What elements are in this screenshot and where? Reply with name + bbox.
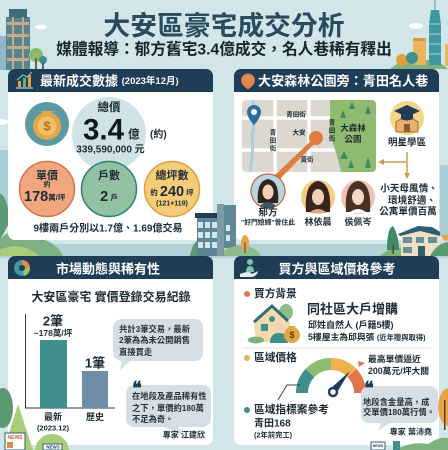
subtitle: 媒體報導：郁方舊宅3.4億成交，名人巷稀有釋出 bbox=[56, 40, 392, 58]
map: 青田街 bbox=[286, 110, 306, 118]
background skyline left bbox=[0, 36, 63, 256]
arrows bbox=[378, 152, 410, 179]
icon: money bag: $ bbox=[43, 118, 51, 134]
section: benchmark project: (2年前完工) bbox=[254, 430, 293, 440]
bar chart: 歷史 bbox=[86, 411, 104, 422]
text: neighbourhood features bbox=[379, 182, 438, 218]
portrait: Patty Hou bbox=[341, 180, 375, 214]
metric: households: 2 戶 bbox=[100, 189, 118, 205]
label: star school district: 明星學區 bbox=[388, 136, 426, 148]
map: 田 bbox=[270, 136, 276, 144]
portrait: Lin Yi-chen bbox=[301, 180, 335, 214]
title: 大安區豪宅成交分析 bbox=[103, 11, 345, 41]
metric: unit price: 單價 bbox=[36, 168, 58, 182]
callout: expert quote: 不足為奇。 bbox=[132, 414, 174, 424]
icon: money bag bbox=[25, 102, 69, 146]
map: 街 bbox=[329, 134, 336, 142]
total price: 339,590,000 元 bbox=[76, 144, 145, 156]
total price: (約) bbox=[150, 128, 167, 140]
callout: expert quote: 地段含金量高，成 bbox=[363, 397, 430, 407]
label: Lin Yi-chen: 林依晨 bbox=[304, 216, 332, 227]
portrait: Yu Fang bbox=[251, 174, 285, 208]
icon: location pin bbox=[242, 74, 254, 89]
label: Yu Fang: 郁方 bbox=[258, 206, 278, 218]
buyer details: 同社區大戶增購 bbox=[307, 302, 398, 316]
total price bbox=[72, 97, 167, 171]
scenery: lower-left trees and newspapers bbox=[0, 388, 69, 450]
icon: school bbox=[390, 101, 424, 135]
bar chart: 2筆 bbox=[43, 314, 63, 328]
section: regional price: 區域價格 bbox=[254, 351, 297, 364]
panel heading: 大安森林公園旁：青田名人巷 bbox=[258, 72, 428, 88]
callout: expert quote bbox=[126, 378, 211, 440]
metric: total area: 約 240 坪 bbox=[150, 184, 194, 200]
metric: unit price: 178萬/坪 bbox=[24, 189, 66, 205]
metric: unit price: 約 bbox=[44, 180, 50, 188]
callout: expert quote: 之下，單價約180萬 bbox=[132, 403, 204, 413]
icon: rising chart bbox=[16, 72, 33, 88]
map: 青 bbox=[270, 128, 277, 136]
highest price note: 200萬元/坪大關 bbox=[368, 365, 429, 376]
callout: expert quote: 專家 江建欣 bbox=[163, 430, 205, 440]
callout: expert quote bbox=[361, 378, 438, 436]
metric: total area bbox=[144, 162, 200, 216]
scenery: house and trees right bbox=[380, 165, 448, 256]
bar chart: 1筆 bbox=[85, 356, 105, 370]
callout: three transactions bbox=[113, 319, 203, 370]
scenery: central buildings bbox=[190, 204, 261, 256]
callout: expert quote: 交單價180萬行情。 bbox=[363, 407, 435, 417]
gauge chart bbox=[302, 361, 365, 396]
section: benchmark project bbox=[244, 403, 329, 440]
panel heading: 最新成交數據 (2023年12月) bbox=[40, 74, 179, 88]
callout: three transactions: 直接買走 bbox=[119, 347, 153, 357]
icon: Taipei 101 skyline right bbox=[390, 0, 448, 69]
metric: total area: (121+119) bbox=[156, 200, 188, 208]
panel heading: 買方與區域價格參考 bbox=[278, 262, 396, 276]
metric: unit price bbox=[20, 162, 74, 216]
section: buyer background: 買方背景 bbox=[254, 287, 297, 300]
icon: house with buyer and money bag: $ bbox=[289, 330, 295, 340]
callout: expert quote: 專家 葉沛堯 bbox=[390, 426, 432, 436]
text: neighbourhood features: 環境舒適、 bbox=[388, 194, 436, 206]
total price: 3.4 bbox=[83, 114, 125, 146]
panel: latest transaction data bbox=[8, 69, 213, 240]
icon: house with buyer and money bag bbox=[248, 304, 300, 344]
icon: hand with person bbox=[240, 259, 258, 277]
icon: pie chart bbox=[14, 260, 30, 276]
map: 大安 bbox=[292, 128, 306, 136]
buyer details bbox=[307, 302, 426, 342]
total price: 總價 bbox=[98, 100, 121, 114]
highest price note bbox=[368, 353, 429, 376]
bar chart bbox=[26, 314, 115, 432]
metric: households: 戶數 bbox=[98, 168, 120, 182]
scenery: lower-left trees and newspapers: NEWS bbox=[46, 444, 60, 450]
panel heading: 市場動態與稀有性 bbox=[56, 262, 160, 276]
background water band bbox=[0, 244, 448, 258]
label: Patty Hou: 侯佩岑 bbox=[344, 216, 372, 227]
metric: total area: 總坪數 bbox=[156, 168, 188, 182]
scenery: lower-right trees and newspaper bbox=[371, 388, 448, 450]
map: 黃街 bbox=[300, 154, 314, 164]
bar chart: (2023.12) bbox=[37, 424, 70, 432]
map: 街 bbox=[270, 144, 277, 152]
bar chart: ~178萬/坪 bbox=[34, 328, 73, 338]
scenery: lower-left trees and newspapers: NEWS bbox=[8, 435, 23, 441]
map: 公園 bbox=[344, 134, 362, 144]
panel: buyers and regional price reference bbox=[234, 256, 439, 445]
buyer details: 邱姓自然人 (戶籍5樓) bbox=[308, 319, 394, 330]
section: benchmark project: 青田168 bbox=[254, 416, 291, 430]
map: 田 bbox=[329, 126, 335, 134]
bar chart: 最新 bbox=[44, 411, 62, 422]
callout: expert quote: ❝ bbox=[132, 378, 142, 398]
callout: three transactions: 共計3筆交易，最新 bbox=[119, 324, 191, 334]
text: neighbourhood features: 公寓單價百萬 bbox=[379, 206, 437, 218]
map: 青 bbox=[329, 118, 336, 126]
label: Yu Fang: "好門媳婦"曾住此 bbox=[241, 218, 295, 226]
callout: expert quote: 在地段及產品稀有性 bbox=[132, 391, 207, 401]
note: 9樓兩戶分別以1.7億、1.69億交易 bbox=[34, 222, 182, 234]
label: Yu Fang bbox=[241, 206, 295, 226]
buyer details: 5樓屋主為邱與張 (近年贈與取得) bbox=[308, 331, 426, 342]
map bbox=[242, 100, 376, 172]
pointer from map to portrait bbox=[274, 131, 323, 180]
callout: three transactions: 2筆為為未公開銷售 bbox=[119, 335, 190, 345]
panel: market dynamics and scarcity bbox=[8, 256, 213, 445]
callout: expert quote: ❝ bbox=[364, 378, 374, 398]
text: neighbourhood features: 小天母風情、 bbox=[380, 182, 438, 194]
section: benchmark project: 區域指標案參考 bbox=[254, 403, 329, 416]
total price: 億 bbox=[128, 127, 140, 141]
chart title: 大安區豪宅 實價登錄交易紀錄 bbox=[31, 289, 191, 304]
icon: office tower top left bbox=[6, 9, 47, 70]
highest price note: 最高單價逼近 bbox=[368, 353, 421, 364]
metric: households bbox=[82, 162, 136, 216]
scenery: lower-right trees and newspaper: NEWS bbox=[373, 444, 384, 448]
panel: Da'an Forest Park bbox=[234, 69, 439, 240]
map: 大森林 bbox=[340, 123, 366, 133]
